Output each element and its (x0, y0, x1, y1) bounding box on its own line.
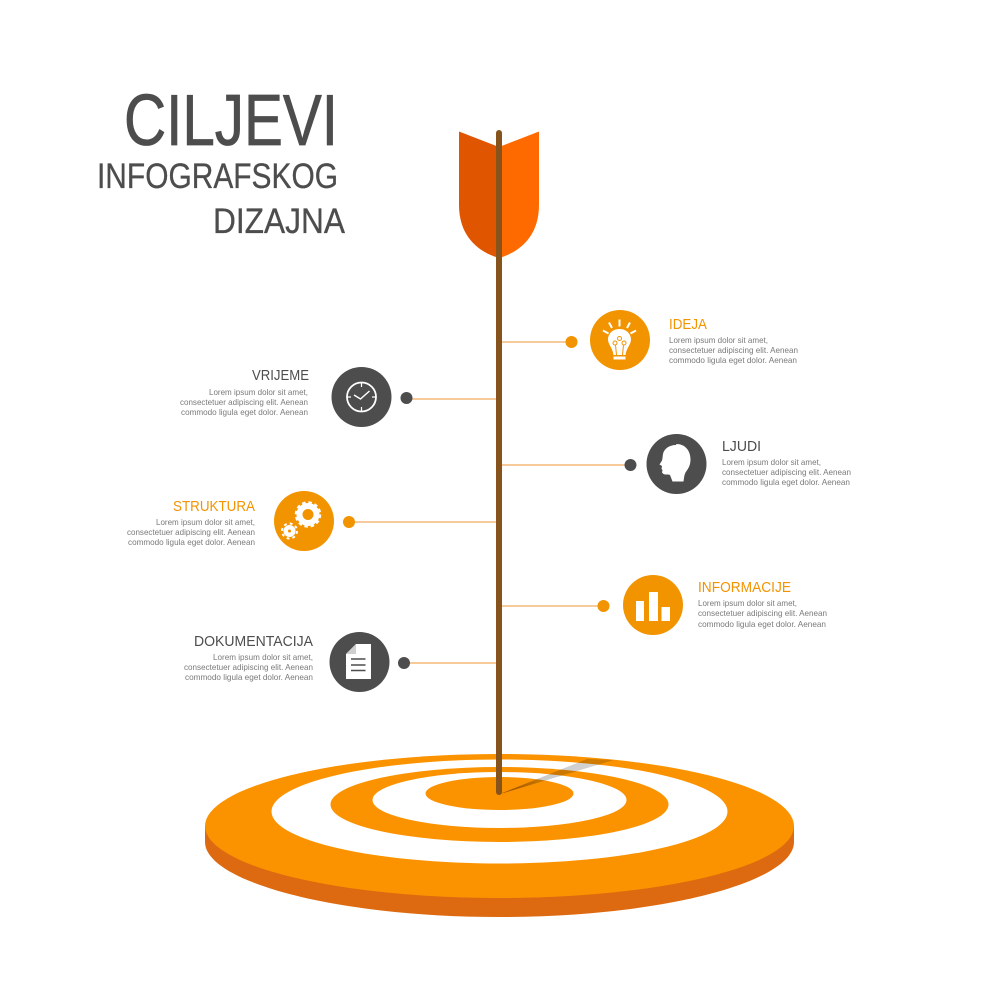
icon: light bulb (590, 310, 650, 370)
text block: consectetuer adipiscing elit. Aenean (127, 527, 255, 537)
dot (566, 336, 578, 348)
item: informacije (598, 575, 827, 635)
heading: INFORMACIJE (698, 579, 791, 596)
arrow fletching right (499, 132, 539, 258)
text block: commodo ligula eget dolor. Aenean (722, 477, 850, 487)
text block: consectetuer adipiscing elit. Aenean (669, 345, 798, 355)
arrow shaft (496, 133, 502, 792)
text block (184, 652, 313, 682)
title: CILJEVI (124, 81, 338, 161)
dot (400, 392, 412, 404)
text block (722, 457, 851, 487)
text block: consectetuer adipiscing elit. Aenean (698, 608, 827, 618)
item: dokumentacija (184, 632, 410, 692)
item: ideja (566, 310, 798, 370)
text block: commodo ligula eget dolor. Aenean (669, 355, 797, 365)
icon: gears (274, 491, 334, 551)
icon: document (330, 632, 390, 692)
text block: consectetuer adipiscing elit. Aenean (180, 397, 308, 407)
text block: commodo ligula eget dolor. Aenean (698, 619, 826, 629)
arrow fletching left (459, 132, 499, 258)
dot (624, 459, 636, 471)
text block: Lorem ipsum dolor sit amet, (209, 387, 308, 397)
text block: Lorem ipsum dolor sit amet, (698, 598, 797, 608)
title (97, 81, 346, 241)
title: INFOGRAFSKOG (97, 157, 338, 196)
text block (698, 598, 827, 629)
dot (398, 657, 410, 669)
dot (598, 600, 610, 612)
arrow shadow (500, 759, 614, 794)
text block (127, 517, 255, 547)
target (205, 754, 794, 917)
item: struktura (127, 491, 355, 551)
title: DIZAJNA (213, 202, 346, 241)
text block: Lorem ipsum dolor sit amet, (156, 517, 255, 527)
text block: consectetuer adipiscing elit. Aenean (184, 662, 313, 672)
icon: bar chart (623, 575, 683, 635)
heading: IDEJA (669, 316, 707, 333)
heading: STRUKTURA (173, 498, 255, 515)
connector lines (349, 342, 630, 663)
text block (669, 335, 798, 365)
item: vrijeme (180, 367, 412, 427)
heading: LJUDI (722, 438, 761, 455)
text block: consectetuer adipiscing elit. Aenean (722, 467, 851, 477)
item: ljudi (624, 434, 851, 494)
text block: Lorem ipsum dolor sit amet, (669, 335, 768, 345)
text block: commodo ligula eget dolor. Aenean (181, 407, 308, 417)
text block (180, 387, 308, 417)
text block: Lorem ipsum dolor sit amet, (213, 652, 313, 662)
icon: head (646, 434, 706, 494)
text block: Lorem ipsum dolor sit amet, (722, 457, 821, 467)
heading: DOKUMENTACIJA (194, 633, 313, 650)
dot (343, 516, 355, 528)
text block: commodo ligula eget dolor. Aenean (128, 537, 255, 547)
text block: commodo ligula eget dolor. Aenean (185, 672, 313, 682)
heading: VRIJEME (252, 367, 309, 384)
arrow (459, 132, 539, 792)
icon: clock (332, 367, 392, 427)
